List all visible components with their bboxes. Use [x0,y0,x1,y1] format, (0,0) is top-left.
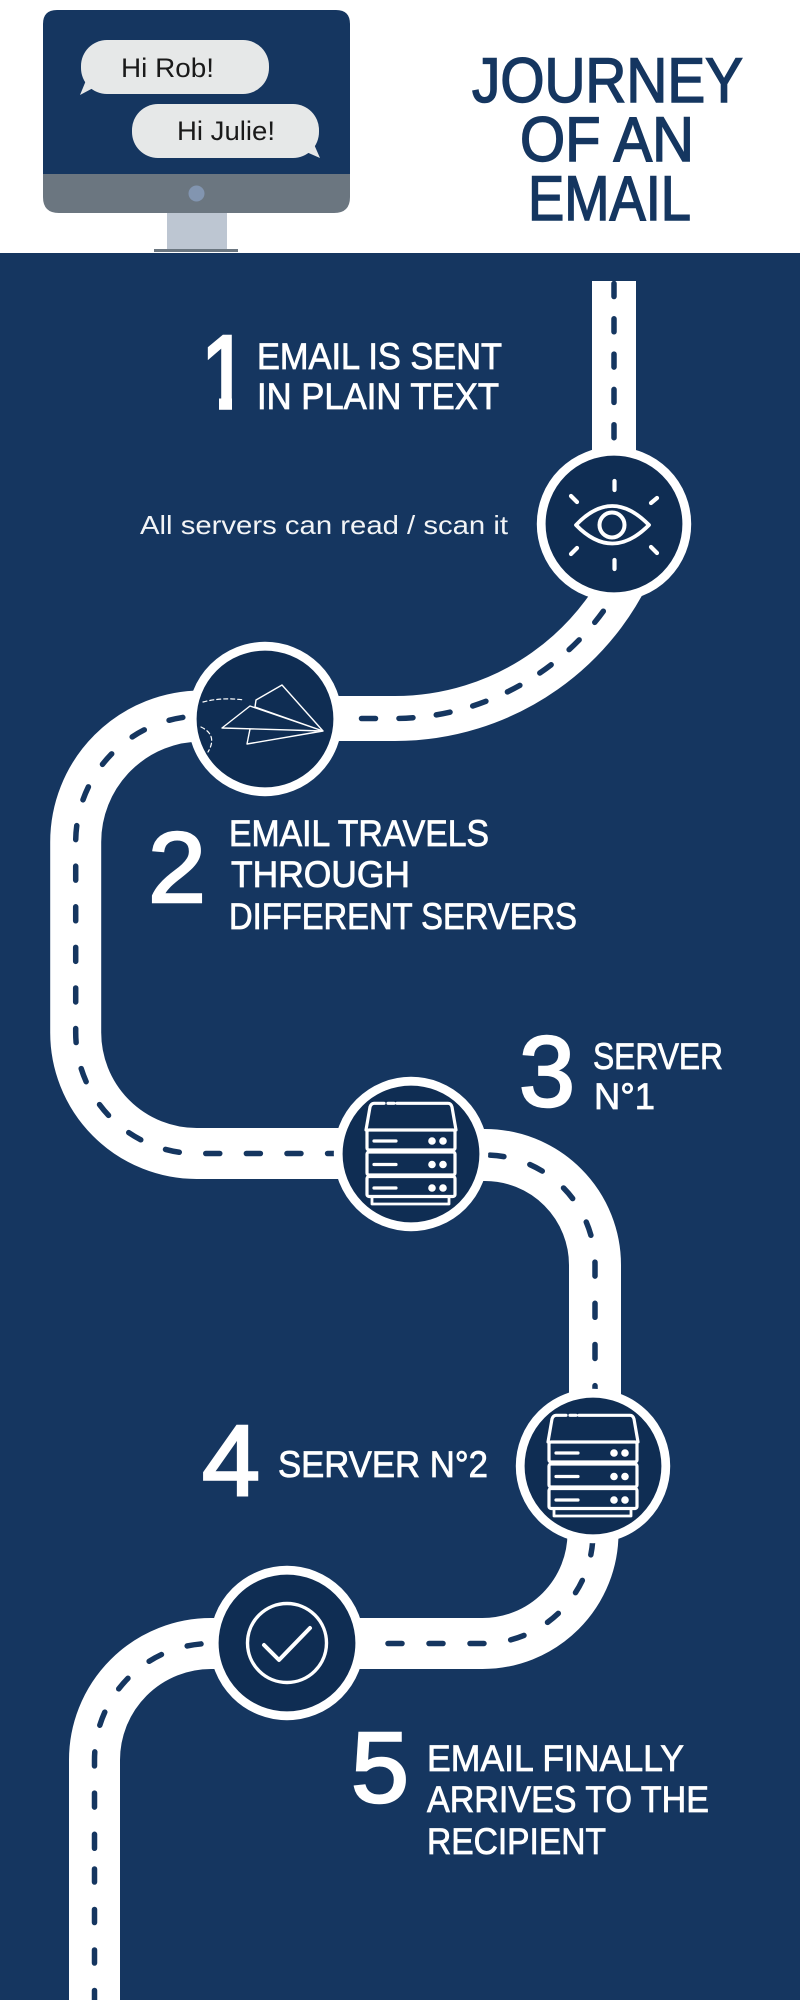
title [472,46,743,234]
chat bubble: Hi Rob: Hi Rob! [121,53,214,83]
step 2: heading [148,812,577,937]
step 3: heading [519,1016,723,1128]
step 1: heading: 1 [201,315,249,431]
step 4: heading: SERVER N°2 [278,1444,488,1485]
step 1: heading [208,334,502,410]
title: EMAIL [528,164,691,234]
step 4: heading: 4 [202,1405,260,1517]
step 5: heading: RECIPIENT [427,1821,606,1862]
step 5: heading: ARRIVES TO THE [427,1779,709,1820]
step 2: heading: EMAIL TRAVELS [229,813,489,854]
icon: check mark in circle [214,1570,360,1716]
step 3: heading: N°1 [594,1076,655,1117]
title: OF AN [520,105,694,175]
step 5: heading [351,1712,709,1862]
step 1: description: All servers can read / scan it [140,510,509,540]
step 4: heading [202,1405,488,1517]
road: step 5 to end [94,1644,287,2000]
step 3: heading: 3 [519,1016,575,1128]
icon: paper plane in circle [192,646,338,792]
step 5: heading: EMAIL FINALLY [427,1738,684,1779]
road: step 1 to step 2 [265,546,640,718]
step 1: heading: EMAIL IS SENT [257,336,502,377]
step 1: heading: IN PLAIN TEXT [257,376,499,417]
road: start to step 1 [592,281,636,461]
step 2: heading: DIFFERENT SERVERS [229,896,577,937]
step 5: heading: 5 [351,1712,409,1824]
road: step 4 to step 5 [287,1466,593,1644]
step 2: heading: THROUGH [231,854,410,895]
step 2: heading: 2 [148,812,206,924]
chat bubble: Hi Julie: Hi Julie! [177,116,275,146]
panel: white header [0,0,800,253]
icon: server 1 in circle [338,1081,484,1227]
chat bubble: Hi Julie [132,104,320,158]
road: step 2 to step 3 [76,716,410,1154]
chat bubble: Hi Rob [80,40,269,95]
step 3: heading: SERVER [593,1036,723,1077]
illustration: desktop monitor with chat [43,10,350,252]
road: step 3 to step 4 [410,1155,595,1466]
icon: server 2 in circle [520,1393,666,1539]
icon: eye in circle [541,451,687,597]
title: JOURNEY [472,46,743,116]
